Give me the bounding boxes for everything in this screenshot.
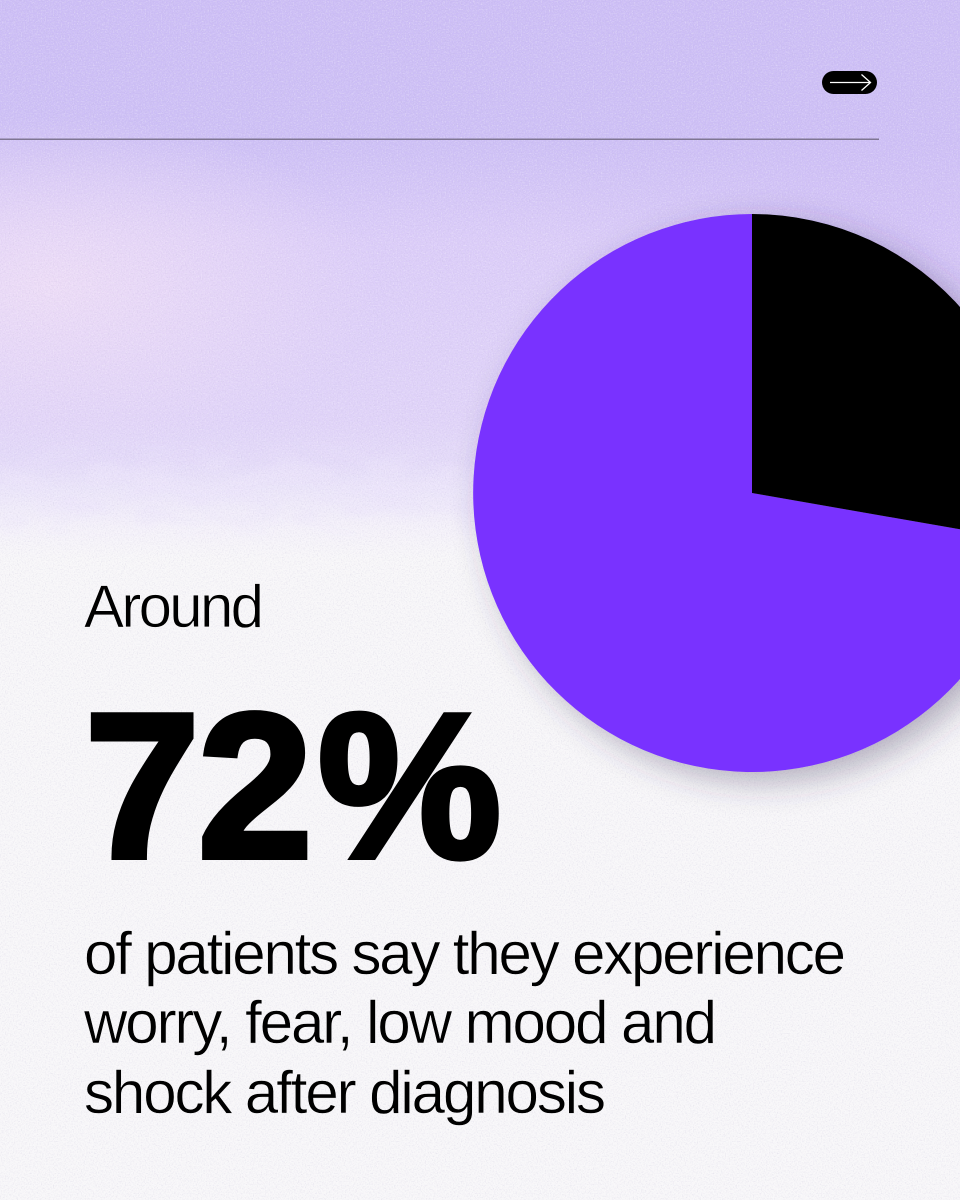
description text: shock after diagnosis xyxy=(84,1059,606,1126)
pie slice: 72% purple xyxy=(473,214,960,772)
divider line xyxy=(0,138,879,140)
big number: 72%: 72% xyxy=(85,671,501,901)
description text: of patients say they experience xyxy=(84,920,846,987)
pie slice: 28% black xyxy=(752,214,960,541)
pie chart xyxy=(473,214,960,772)
text: Around: Around xyxy=(84,573,264,640)
description text: worry, fear, low mood and xyxy=(83,989,717,1056)
description text xyxy=(83,920,846,1126)
icon: arrow pill xyxy=(822,71,877,94)
